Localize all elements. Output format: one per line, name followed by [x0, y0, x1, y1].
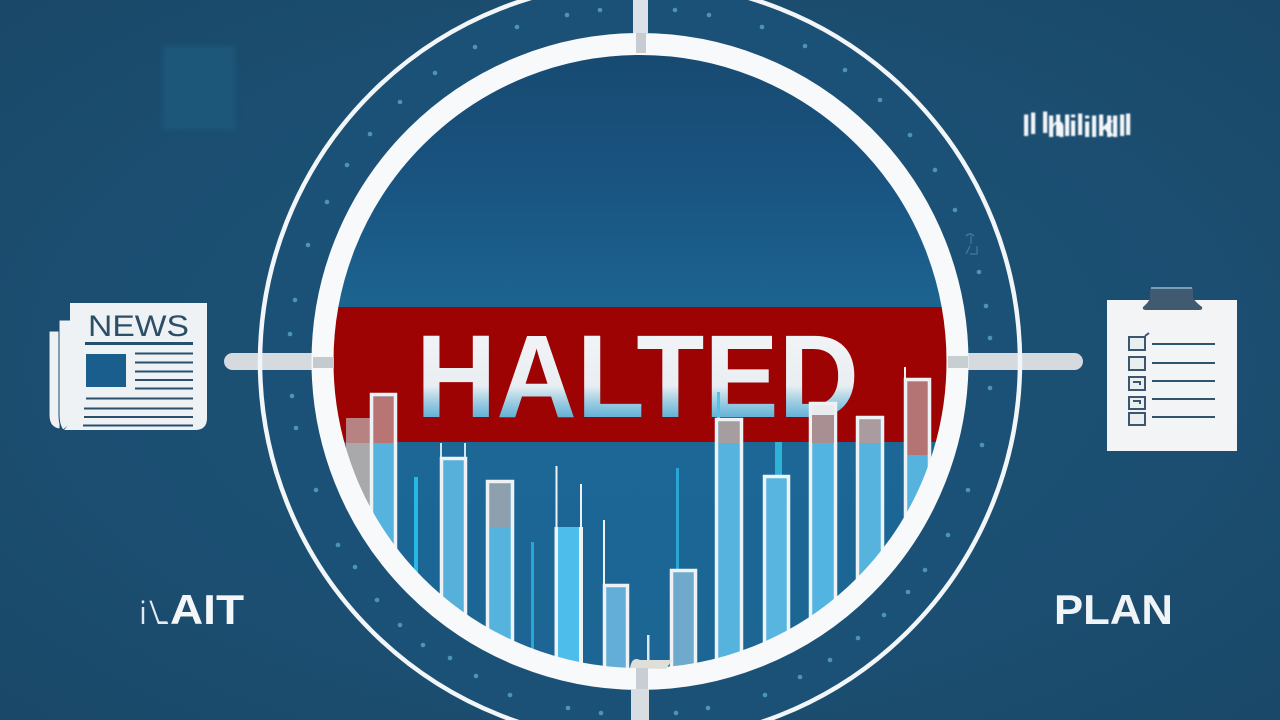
label: plan: PLAN — [1054, 586, 1173, 633]
icon: clipboard checklist — [1107, 287, 1237, 451]
bar 5 — [556, 466, 581, 700]
left tick over ring — [313, 357, 334, 368]
label: wait: i — [140, 595, 146, 631]
bar 12 — [904, 367, 932, 518]
faint document ghost — [163, 46, 235, 130]
bar 7 — [672, 468, 696, 680]
headline: HALTED — [416, 311, 859, 443]
outer thin ring — [260, 0, 1020, 720]
bar 9 — [764, 442, 788, 676]
bottom crosshair tick — [630, 659, 672, 720]
bar 8 — [716, 392, 742, 680]
white main ring — [322, 44, 958, 679]
label: wait: L — [145, 594, 172, 632]
ring band — [285, 7, 995, 717]
icon: newspaper: NEWS — [88, 310, 189, 343]
thin cyan line 2 — [531, 542, 534, 649]
faint small icon — [966, 234, 977, 254]
thin line — [647, 635, 650, 660]
icon: newspaper — [49, 303, 207, 430]
bar 10 — [810, 404, 836, 664]
inner disc — [330, 52, 950, 672]
right tick over ring — [948, 356, 968, 368]
label: wait — [140, 586, 244, 633]
bar 4 — [488, 482, 512, 662]
bar 6 — [604, 520, 628, 696]
label: wait: AIT — [170, 586, 244, 633]
thin cyan line 1 — [414, 477, 418, 577]
right crosshair tick — [942, 353, 1083, 370]
garbled label top right: lllhllililkllll — [1022, 107, 1132, 144]
bar 2 — [372, 394, 396, 584]
ring dots — [288, 8, 992, 715]
left crosshair tick — [224, 353, 339, 370]
bar 11 — [856, 416, 884, 580]
bar chart — [346, 367, 930, 700]
red banner — [330, 307, 950, 442]
bar 1 — [346, 418, 370, 506]
bar 3 — [441, 443, 466, 638]
top crosshair tick — [633, 0, 648, 53]
